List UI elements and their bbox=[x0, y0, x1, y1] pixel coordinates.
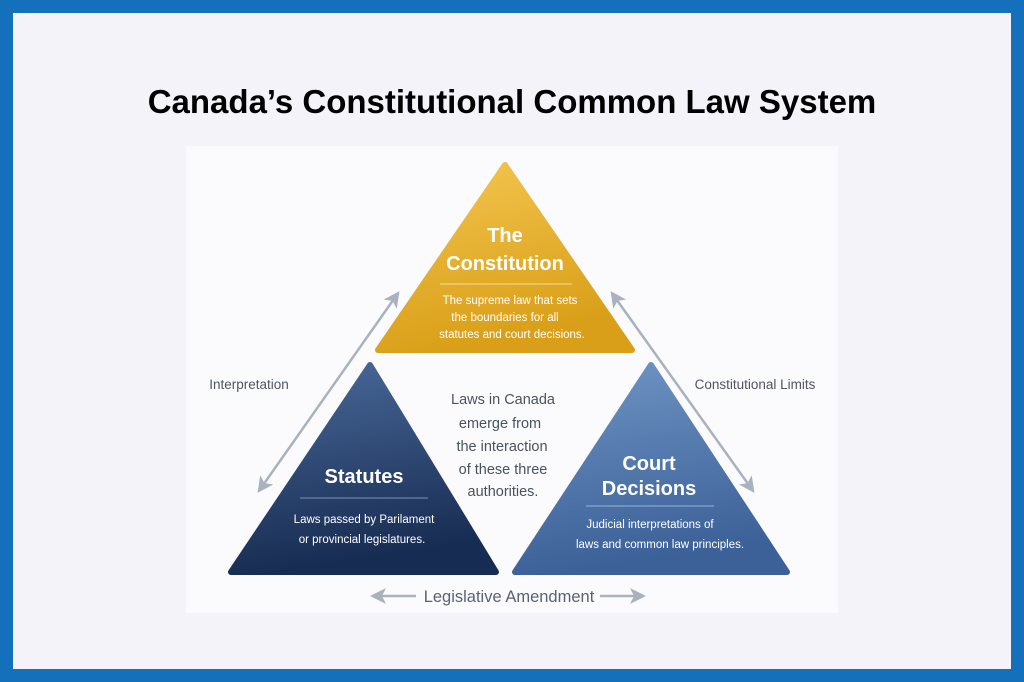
triangle: The Constitution: the boundaries for all bbox=[451, 312, 559, 324]
center text: Laws in Canada bbox=[451, 392, 556, 408]
arrow: interpretation bbox=[209, 296, 396, 488]
arrow: interpretation: Interpretation bbox=[209, 377, 289, 392]
triangle: Court Decisions: laws and common law principles. bbox=[576, 539, 744, 551]
arrow: legislative amendment: Legislative Amendment bbox=[424, 588, 595, 606]
triangle: Statutes: Laws passed by Parilament bbox=[294, 514, 435, 526]
triangle: Statutes: Statutes bbox=[325, 466, 403, 488]
triangle: Court Decisions: Court bbox=[622, 453, 676, 475]
center text: emerge from bbox=[459, 416, 541, 432]
panel: diagram background bbox=[186, 146, 838, 613]
center text bbox=[451, 392, 556, 500]
triangle: The Constitution: statutes and court decisions. bbox=[439, 329, 585, 341]
triangle: The Constitution: The bbox=[487, 225, 523, 247]
triangle: Court Decisions bbox=[515, 365, 787, 572]
title: Canada’s Constitutional Common Law System bbox=[148, 83, 876, 120]
center text: of these three bbox=[459, 462, 547, 478]
center text: the interaction bbox=[456, 439, 548, 455]
triangle: Court Decisions: Decisions bbox=[602, 478, 696, 500]
triangle: Statutes bbox=[231, 365, 496, 572]
triangle: The Constitution: The supreme law that sets bbox=[443, 295, 578, 307]
triangle: Court Decisions: Judicial interpretations of bbox=[586, 519, 714, 531]
triangle: The Constitution: Constitution bbox=[446, 253, 564, 275]
arrow: constitutional limits bbox=[614, 296, 816, 488]
center text: authorities. bbox=[468, 484, 538, 500]
arrow: constitutional limits: Constitutional Limits bbox=[695, 377, 816, 392]
triangle: The Constitution bbox=[378, 165, 632, 350]
triangle: Statutes: or provincial legislatures. bbox=[299, 534, 425, 546]
